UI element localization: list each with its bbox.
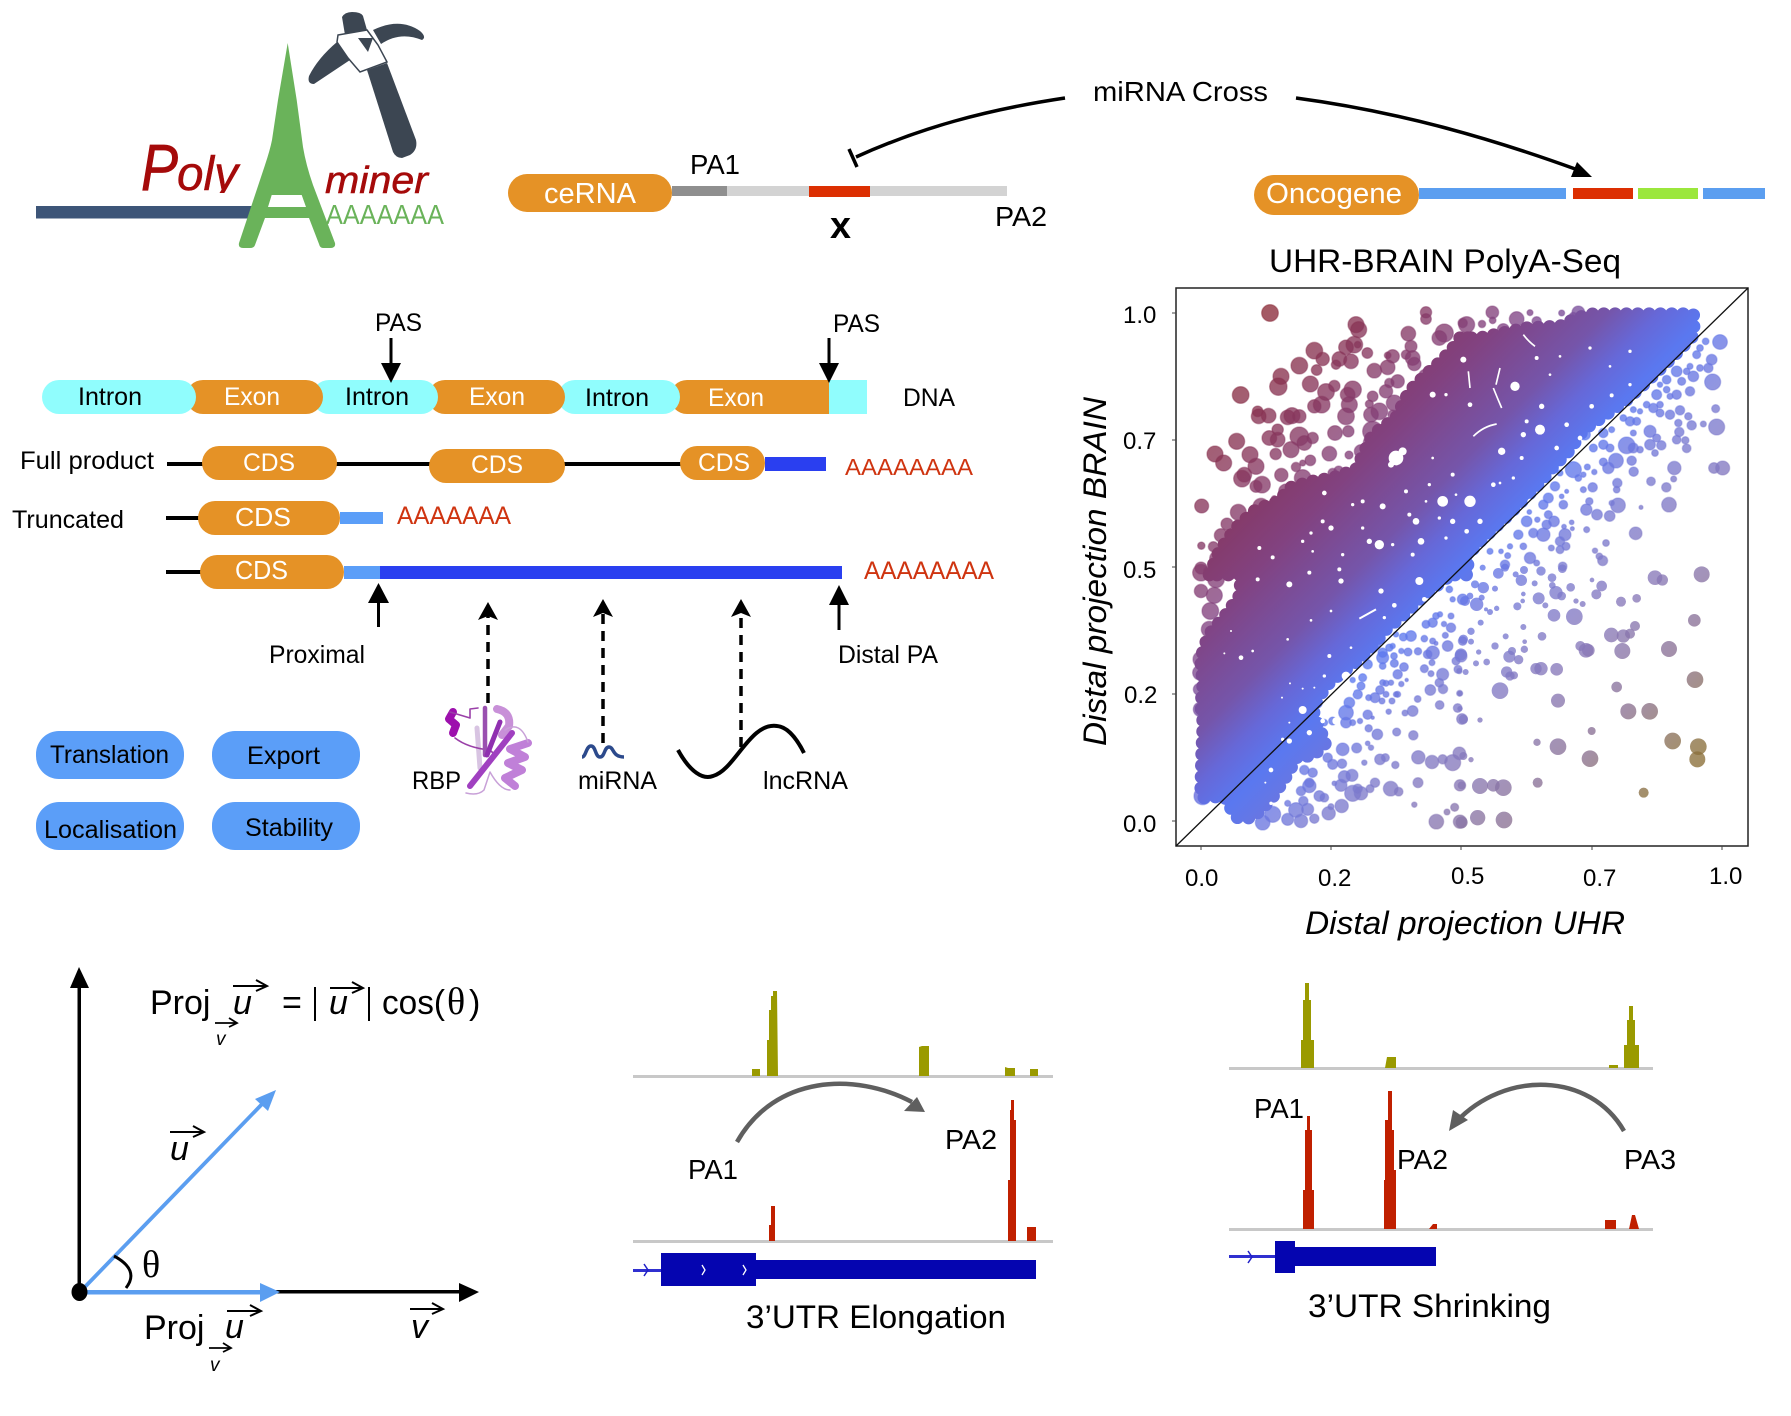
oncogene pill: [1254, 175, 1419, 215]
olive coverage peaks: [1301, 983, 1639, 1068]
label RBP: RBP: [412, 767, 461, 795]
icon: RBP protein: [449, 708, 528, 794]
arrow to oncogene: [1296, 98, 1592, 177]
scatter plot: [1077, 243, 1748, 941]
blue vector u: [80, 1090, 276, 1292]
origin dot: [72, 1283, 88, 1301]
dashed arrow lncRNA: [731, 599, 751, 747]
red coverage peaks: [1303, 1091, 1639, 1229]
axis ticks: [1172, 313, 1722, 850]
label PA2: PA2: [945, 1124, 997, 1155]
y axis title: Distal projection BRAIN: [1077, 396, 1113, 746]
label miRNA: miRNA: [578, 767, 657, 795]
y tick labels: 0.5: [1123, 557, 1156, 584]
formula: Proj: [150, 984, 210, 1022]
logo: word Poly: [141, 130, 245, 206]
label PA2: PA2: [995, 201, 1047, 232]
x tick labels: 0.2: [1318, 865, 1351, 892]
ceRNA pill: [508, 174, 672, 212]
truncated transcript: [12, 501, 511, 535]
gene model: [633, 1253, 1036, 1286]
olive coverage peaks: [752, 991, 1038, 1076]
icon: lncRNA curve: [678, 726, 804, 777]
miRNA site on ceRNA: [809, 186, 870, 197]
DNA segment labels: [78, 383, 764, 412]
y tick labels: 1.0: [1123, 302, 1156, 329]
label PA3: PA3: [1624, 1144, 1676, 1175]
label projection: u: [225, 1308, 244, 1346]
formula: ): [469, 984, 480, 1022]
truncated transcript: CDS: [235, 502, 291, 532]
upper coverage axis: [1229, 1067, 1653, 1070]
y axis arrow: [70, 967, 89, 1292]
pill Translation: Translation: [50, 741, 169, 769]
DNA bar: [42, 380, 867, 414]
DNA segment labels: Intron: [78, 383, 142, 411]
DNA segment labels: Exon: [708, 384, 764, 412]
logo: word Poly: P: [141, 130, 178, 204]
DNA segment labels: Intron: [345, 383, 409, 411]
gene model: [1229, 1241, 1436, 1273]
caption: 3’UTR Shrinking: [1308, 1288, 1551, 1324]
label PA1: PA1: [690, 149, 740, 180]
upper coverage axis: [633, 1075, 1053, 1078]
y tick labels: 0.0: [1123, 811, 1156, 838]
x tick labels: 0.5: [1451, 863, 1484, 890]
y tick labels: [1123, 302, 1157, 838]
function pills: [36, 731, 360, 850]
DNA segment labels: Exon: [469, 383, 525, 411]
grey shift arrow: [737, 1084, 925, 1142]
lower coverage axis: [1229, 1228, 1653, 1231]
plot frame: [1176, 288, 1748, 846]
pill Export: [212, 731, 360, 779]
long 3'UTR transcript: AAAAAAAA: [864, 557, 994, 585]
x tick labels: 0.7: [1583, 865, 1616, 892]
full product transcript: AAAAAAAA: [845, 454, 974, 480]
proximal arrow: Proximal: [269, 641, 365, 669]
grey shift arrow: [1449, 1085, 1624, 1131]
distal arrow: Distal PA: [838, 641, 938, 669]
label projection: Proj: [144, 1309, 204, 1347]
icon: miRNA squiggle: [582, 746, 624, 757]
angle arc: [114, 1256, 131, 1288]
distal arrow: [829, 585, 938, 669]
label PA1: PA1: [1254, 1093, 1304, 1124]
PAS arrow 2: PAS: [833, 310, 880, 338]
vector projection diagram: [70, 967, 480, 1376]
full product transcript: CDS: [243, 449, 295, 477]
panel: 3'UTR shrinking: [1229, 983, 1676, 1324]
pill Stability: [212, 802, 360, 850]
label vector u: u: [170, 1130, 189, 1168]
scatter white gaps: [1223, 335, 1632, 805]
x tick labels: [1185, 863, 1742, 892]
caption: 3’UTR Elongation: [746, 1299, 1006, 1335]
pill Localisation: [36, 802, 184, 850]
full product transcript: [20, 446, 974, 483]
formula: [150, 980, 480, 1050]
logo: poly-A tail: AAAAAAA: [326, 199, 444, 230]
dashed arrow miRNA: [593, 599, 613, 743]
panel: 3'UTR elongation: [633, 991, 1053, 1335]
logo: word miner: miner: [325, 160, 429, 202]
PAS arrow 1: PAS: [375, 309, 422, 337]
pill Translation: [36, 731, 184, 779]
x tick labels: 1.0: [1709, 863, 1742, 890]
pill Stability: Stability: [245, 814, 333, 842]
label vector v: v: [411, 1308, 430, 1346]
formula: =: [282, 984, 302, 1022]
truncated transcript: Truncated: [12, 506, 124, 534]
truncated transcript: AAAAAAA: [397, 502, 511, 530]
red coverage peaks: [769, 1100, 1036, 1241]
label vector u: [170, 1126, 204, 1168]
logo: word Poly: oly: [177, 148, 241, 201]
long 3'UTR transcript: [166, 555, 994, 589]
theta label: θ: [142, 1244, 160, 1286]
long 3'UTR transcript: CDS: [235, 555, 288, 585]
DNA segment labels: Intron: [585, 384, 649, 412]
x axis arrow: [80, 1283, 479, 1302]
formula: cos(: [382, 984, 446, 1022]
DNA segment labels: Exon: [224, 383, 280, 411]
scatter title: UHR-BRAIN PolyA-Seq: [1269, 243, 1621, 279]
pill Export: Export: [247, 742, 320, 770]
formula: u: [233, 984, 252, 1022]
oncogene UTR segments: [1419, 188, 1566, 199]
label DNA: DNA: [903, 384, 955, 412]
oncogene transcript: [1254, 175, 1765, 215]
ceRNA transcript: [508, 149, 1047, 247]
formula: θ: [447, 981, 465, 1023]
logo: pickaxe: [309, 12, 424, 158]
formula: v: [216, 1029, 227, 1050]
logo: blue transcript bar: [36, 206, 256, 218]
lower coverage axis: [633, 1240, 1053, 1243]
label lncRNA: lncRNA: [763, 767, 848, 795]
label vector v: [410, 1303, 443, 1346]
label PA1: PA1: [688, 1154, 738, 1185]
label projection: v: [210, 1355, 221, 1376]
label projection: [144, 1305, 261, 1376]
ceRNA UTR line: [672, 186, 1007, 196]
PAS arrow 2: [819, 310, 880, 383]
blue projection arrow: [85, 1283, 280, 1302]
dashed arrow RBP: [478, 602, 498, 703]
x axis title: Distal projection UHR: [1305, 905, 1625, 941]
inhibition arrow to ceRNA: [849, 98, 1065, 167]
diagonal line: [1176, 288, 1748, 846]
pill Localisation: Localisation: [44, 816, 177, 844]
full product transcript: Full product: [20, 447, 154, 475]
logo: PolyAminer: [36, 12, 444, 248]
scatter points: [1193, 305, 1730, 830]
x tick labels: 0.0: [1185, 865, 1218, 892]
proximal arrow: [269, 583, 389, 669]
y tick labels: 0.2: [1124, 682, 1157, 709]
full product transcript: CDS: [698, 449, 750, 477]
full product transcript: CDS: [471, 451, 523, 479]
logo: big green letter A: [239, 43, 335, 248]
label PA2: PA2: [1397, 1144, 1448, 1175]
y tick labels: 0.7: [1123, 428, 1156, 455]
formula: u: [329, 984, 348, 1022]
PAS arrow 1: [375, 309, 422, 383]
oncogene pill: Oncogene: [1266, 178, 1402, 210]
ceRNA pill: ceRNA: [544, 178, 637, 210]
label x: x: [830, 205, 851, 247]
miRNA Cross label: miRNA Cross: [1093, 76, 1268, 107]
